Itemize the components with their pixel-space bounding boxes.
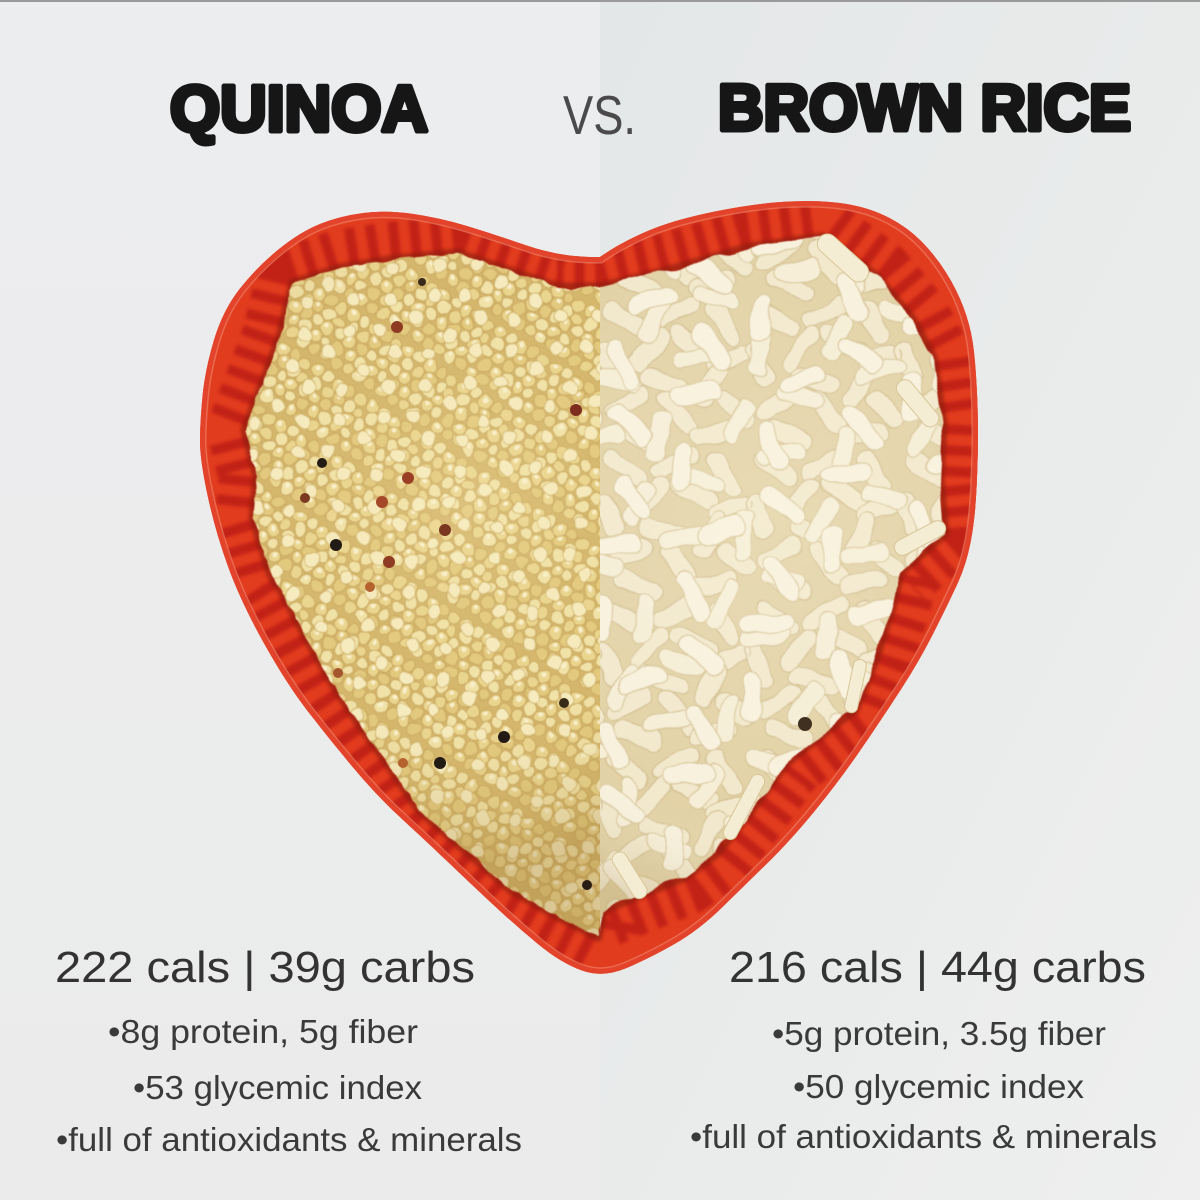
stats: brown rice: [690, 943, 1157, 1155]
bowl: shadow under grains: [245, 237, 945, 937]
quinoa glycemic index: •53 glycemic index: [133, 1069, 423, 1106]
quinoa antioxidants: •full of antioxidants & minerals: [56, 1121, 522, 1158]
rice: large foreground grains: [609, 230, 948, 901]
title: vs.: VS.: [563, 84, 636, 146]
title: quinoa: QUINOA: [170, 72, 428, 145]
stats: quinoa: [55, 943, 522, 1158]
title: brown rice: BROWN RICE: [718, 71, 1131, 144]
quinoa: dark and red seeds: [300, 278, 592, 890]
background: left panel: [0, 0, 600, 1200]
bowl: red body: [200, 201, 978, 974]
bowl: fluted ribs: [200, 201, 978, 974]
background: right panel: [600, 0, 1200, 1200]
rice protein and fiber: •5g protein, 3.5g fiber: [772, 1015, 1106, 1052]
brown rice half: [600, 235, 946, 932]
heart bowl with grains: [200, 201, 978, 974]
rice glycemic index: •50 glycemic index: [793, 1068, 1085, 1105]
rice antioxidants: •full of antioxidants & minerals: [690, 1118, 1157, 1155]
quinoa protein and fiber: •8g protein, 5g fiber: [108, 1013, 418, 1050]
rice calories and carbs: 216 cals | 44g carbs: [729, 943, 1146, 992]
quinoa half: [244, 252, 600, 936]
rice: dark spot: [798, 717, 812, 731]
quinoa calories and carbs: 222 cals | 39g carbs: [55, 943, 475, 992]
